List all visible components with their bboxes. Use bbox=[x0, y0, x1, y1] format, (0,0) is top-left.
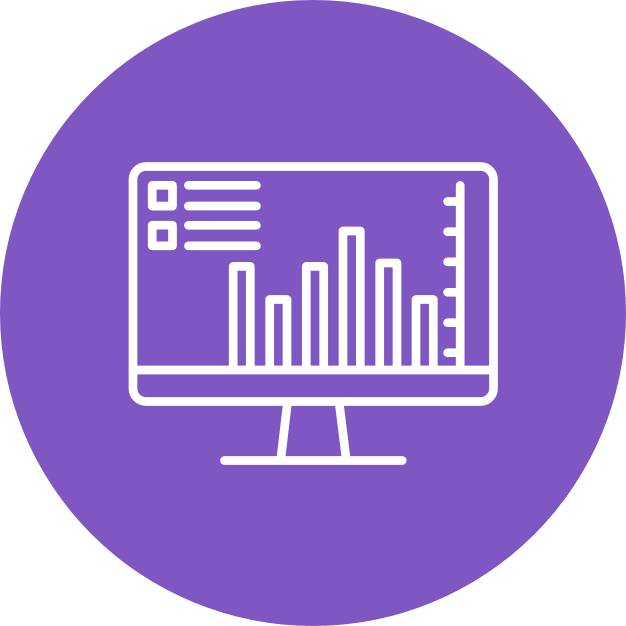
list icon: second checkbox bbox=[152, 225, 172, 246]
bar 1 bbox=[233, 266, 250, 368]
monitor stand bbox=[281, 404, 346, 460]
icon: monitor bbox=[133, 166, 494, 460]
bar 2 bbox=[270, 300, 287, 368]
bar chart bbox=[233, 231, 433, 368]
list lines bbox=[188, 185, 256, 246]
bar 3 bbox=[306, 266, 324, 368]
bar 5 bbox=[380, 263, 397, 368]
bar 4 bbox=[343, 231, 360, 368]
monitor screen frame bbox=[133, 166, 494, 402]
vertical ruler scale bbox=[448, 185, 460, 368]
monitor base bbox=[224, 456, 402, 465]
list icon: first checkbox bbox=[152, 185, 172, 206]
monitor bottom bezel line bbox=[133, 366, 494, 374]
bar 6 bbox=[416, 300, 433, 368]
